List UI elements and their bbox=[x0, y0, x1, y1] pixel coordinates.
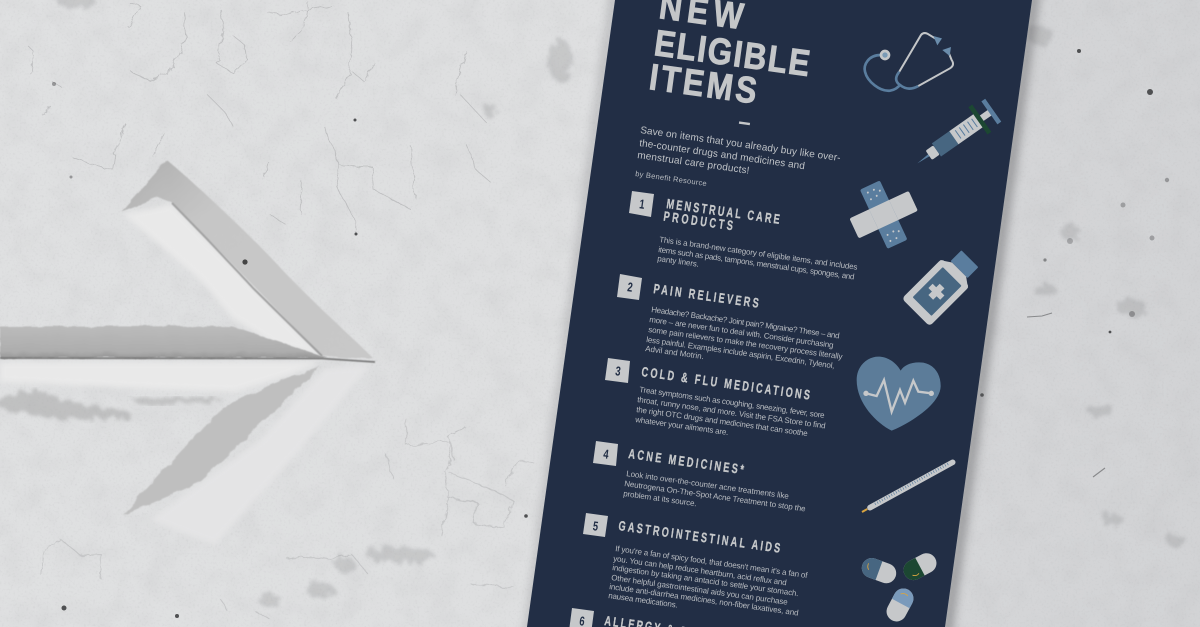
number box 3: 3 bbox=[614, 365, 622, 379]
body 2: Headache? Backache? Joint pain? Migraine? These – and bbox=[651, 305, 840, 340]
body 1: This is a brand-new category of eligible items, and includes bbox=[659, 235, 858, 272]
number box 5: 5 bbox=[592, 520, 599, 534]
body 4: problem at its source. bbox=[623, 489, 697, 508]
icon: thermometer bbox=[862, 462, 953, 512]
title: ITEMS bbox=[647, 57, 759, 112]
icon: heart with pulse bbox=[857, 357, 941, 431]
body 1: panty liners. bbox=[657, 254, 700, 269]
heading 4: ACNE MEDICINES* bbox=[628, 448, 745, 478]
body 3: whatever your ailments are. bbox=[634, 415, 729, 437]
body 3 bbox=[634, 385, 826, 438]
body 5: indigestion by taking an antacid to settle your stomach. bbox=[612, 563, 799, 598]
body 4: Look into over-the-counter acne treatments like bbox=[626, 469, 790, 501]
icon: stethoscope bbox=[865, 33, 953, 91]
arrow lower barb bbox=[123, 366, 320, 515]
heading 5: GASTROINTESTINAL AIDS bbox=[618, 520, 781, 556]
heading 3: COLD & FLU MEDICATIONS bbox=[641, 366, 811, 403]
icon: pills bbox=[859, 550, 940, 625]
intro text: the-counter drugs and medicines and bbox=[639, 138, 805, 172]
byline: by Benefit Resource bbox=[635, 169, 707, 188]
body 3: Treat symptoms such as coughing, sneezing, fever, sore bbox=[639, 385, 826, 420]
panel: infographic sheet bbox=[527, 0, 1032, 627]
body 2: less painful. Examples include aspirin, Excedrin, Tylenol, bbox=[646, 335, 835, 370]
body 4: Neutrogena On-The-Spot Acne Treatment to stop the bbox=[624, 479, 807, 514]
panel shadow bbox=[525, 0, 1040, 627]
number box 6 bbox=[569, 608, 594, 627]
icon: bandage bbox=[840, 171, 927, 258]
title: ELIGIBLE bbox=[652, 23, 812, 85]
arrow upper barb bbox=[121, 160, 375, 360]
item 2: pain relievers bbox=[617, 274, 843, 370]
item 6: allergy and sinus, cropped bbox=[569, 608, 717, 627]
body 2 bbox=[645, 305, 843, 370]
intro text: menstrual care products! bbox=[637, 150, 750, 177]
item 4: acne medicines bbox=[593, 441, 807, 514]
body 2: some pain relievers to make the recovery process literally bbox=[648, 325, 843, 361]
number box 2: 2 bbox=[626, 281, 634, 295]
number box 1: 1 bbox=[638, 198, 646, 212]
item 1: menstrual care products bbox=[629, 191, 858, 282]
body 5: include anti-diarrhea medicines, non-fiber laxatives, and bbox=[609, 582, 799, 618]
number box 4: 4 bbox=[602, 448, 610, 462]
item 3: cold and flu medications bbox=[605, 358, 826, 438]
number box 5 bbox=[583, 513, 608, 537]
body 3: the right OTC drugs and medicines that can soothe bbox=[636, 405, 809, 438]
number box 3 bbox=[605, 358, 630, 383]
intro text: Save on items that you already buy like over- bbox=[640, 125, 841, 164]
shaft dark line bbox=[0, 358, 375, 362]
number box 2 bbox=[617, 274, 642, 300]
icon: syringe bbox=[908, 97, 1003, 177]
body 3: throat, runny nose, and more. Visit the FSA Store to find bbox=[637, 395, 826, 430]
body 2: Advil and Motrin. bbox=[645, 344, 704, 361]
title dash bbox=[739, 121, 750, 125]
item 5: gastrointestinal aids bbox=[583, 513, 809, 618]
arrow carved into the concrete bbox=[0, 160, 375, 545]
body 5 bbox=[608, 544, 809, 618]
heading 1: PRODUCTS bbox=[663, 210, 734, 234]
body 1: items such as pads, tampons, menstrual cups, sponges, and bbox=[658, 245, 855, 282]
icon: medicine bottle bbox=[902, 245, 984, 326]
arrow barb shadow bbox=[172, 203, 322, 356]
body 5: Other helpful gastrointestinal aids you can purchase bbox=[611, 573, 789, 607]
body 5: you. You can help reduce heartburn, acid reflux and bbox=[613, 554, 787, 587]
body 2: more – are never fun to deal with. Consider purchasing bbox=[649, 315, 834, 350]
heading 1: MENSTRUAL CARE bbox=[666, 198, 781, 227]
stipple under shaft bbox=[0, 390, 130, 420]
body 5: nausea medications. bbox=[608, 591, 678, 610]
number box 1 bbox=[629, 191, 654, 217]
arrow shaft bbox=[0, 326, 328, 358]
heading 2: PAIN RELIEVERS bbox=[653, 283, 760, 311]
title bbox=[647, 0, 812, 112]
number box 4 bbox=[593, 441, 618, 466]
body 5: If you're a fan of spicy food, that doesn't mean it's a fan of bbox=[615, 544, 809, 580]
